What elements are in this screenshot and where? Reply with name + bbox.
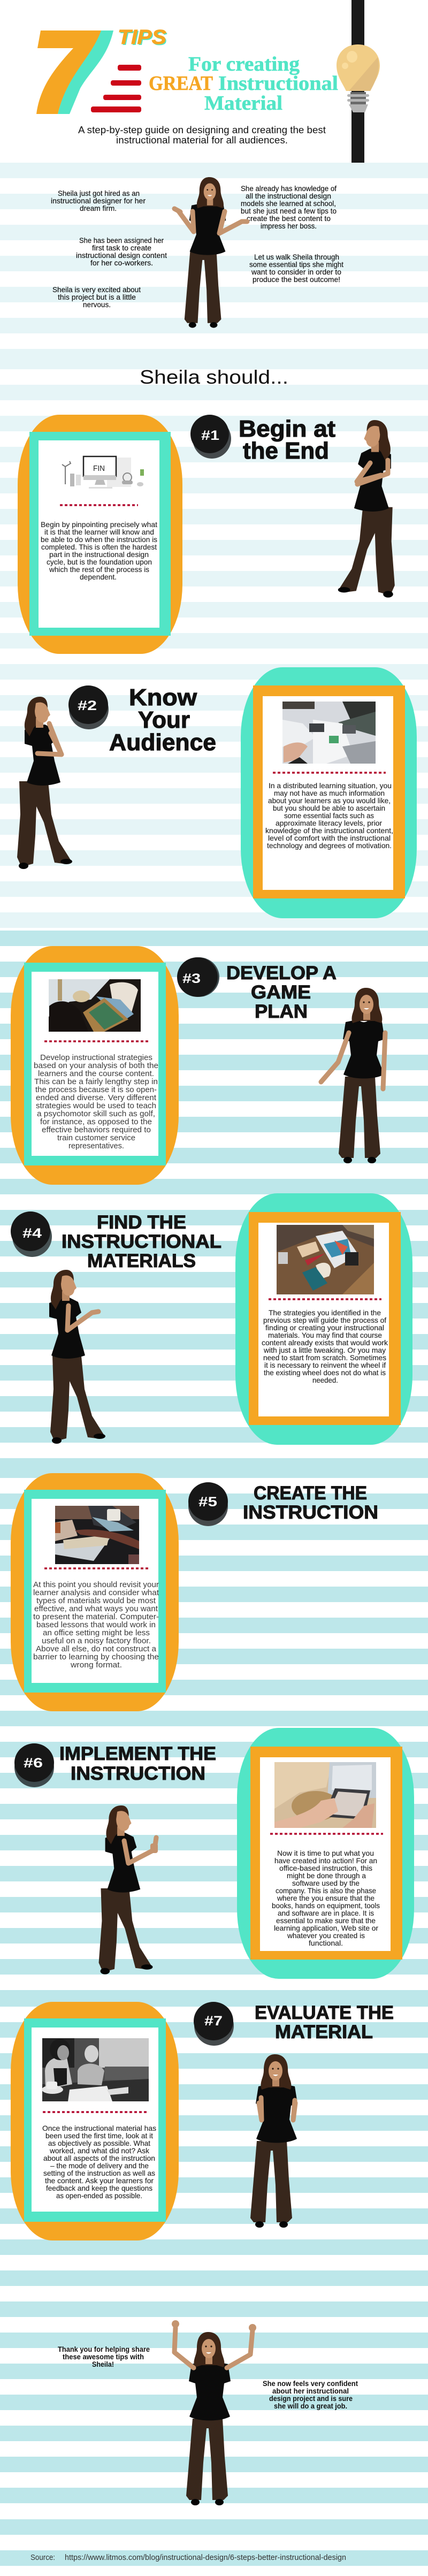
icon: light bulb on cord <box>337 0 380 163</box>
photo: flat lay of products on a table <box>277 1225 374 1294</box>
tip 1 text: Begin by pinpointing precisely what <box>41 520 157 529</box>
panel: tip 4 <box>235 1193 412 1445</box>
tip 2 text: but you should be able to ascertain <box>273 804 385 812</box>
subtitle: instructional material for all audiences. <box>116 135 288 146</box>
tip 2 text: some essential facts such as <box>284 811 374 820</box>
badge: number 4 <box>11 1211 52 1257</box>
subtitle <box>78 125 326 146</box>
tip 5 text: based lessons that would work in <box>36 1620 156 1629</box>
tip 5 text: wrong format. <box>70 1660 122 1670</box>
heading: Find the instructional materials <box>62 1212 221 1271</box>
figure: Sheila with crossed arms <box>338 420 395 598</box>
tip 6 text: essential to make sure that the <box>276 1916 376 1925</box>
title: Material <box>204 92 282 115</box>
intro text: right column 1: She already has knowledge of <box>241 184 337 193</box>
dotted divider <box>269 1298 381 1300</box>
tip 4 text: needed. <box>312 1376 338 1384</box>
source line: https://www.litmos.com/blog/instructional-design/6-steps-better-instructional-design <box>65 2553 346 2562</box>
card frame <box>18 415 182 654</box>
photo: two women laughing at a table <box>42 2038 149 2101</box>
heading: Find the instructional materials: INSTRUCTIONAL <box>62 1231 221 1252</box>
heading: Know Your Audience: Audience <box>109 729 216 756</box>
tip 2 text: technology and degrees of motivation. <box>267 841 392 850</box>
heading: Create the instruction: INSTRUCTION <box>243 1502 378 1523</box>
tip 6 text: learning application, Web site or <box>274 1924 378 1932</box>
photo: computer with FIN on screen <box>62 456 144 489</box>
panel: tip 5 <box>11 1473 179 1711</box>
intro text: left column 2: She has been assigned her <box>79 236 164 245</box>
tip 4 text: need to start from scratch. Sometimes <box>263 1353 386 1362</box>
intro text: left column 2: instructional design content <box>76 251 167 260</box>
panel: tip 1 <box>18 415 182 654</box>
subtitle: A step-by-step guide on designing and creating the best <box>78 125 326 135</box>
tip 3 text <box>34 1053 158 1150</box>
figure: Sheila thinking <box>17 697 72 869</box>
tip 4 text: the existing wheel does not do what is <box>264 1368 386 1377</box>
icon: big number 7 <box>36 31 113 114</box>
tip 6 text: might be done through a <box>287 1871 366 1880</box>
heading: Implement the instruction: INSTRUCTION <box>71 1763 205 1784</box>
intro text: left column 1 <box>51 189 146 212</box>
figure: Sheila gesturing <box>321 988 385 1163</box>
closing text: thank you <box>58 2345 150 2368</box>
intro text: right column 2: some essential tips she might <box>249 260 343 269</box>
tip 3 text: the process because it is so open- <box>35 1085 157 1094</box>
heading: Develop a game plan: GAME <box>251 982 311 1003</box>
card frame <box>237 1728 414 1979</box>
dotted divider <box>270 1833 383 1835</box>
intro text: right column 1: all the instructional design <box>246 192 331 200</box>
closing text: thank you: Thank you for helping share <box>58 2345 150 2353</box>
tip 7 text: as objectively as possible. What <box>48 2139 150 2147</box>
intro text: right column 2: produce the best outcome! <box>253 275 340 284</box>
intro text: right column 2: Let us walk Sheila through <box>254 253 339 261</box>
tip 6 text: have created into action! For an <box>274 1856 377 1865</box>
heading: Develop a game plan: DEVELOP A <box>226 963 337 984</box>
tip 5 text: At this point you should revisit your <box>33 1580 159 1589</box>
heading: Evaluate the material: MATERIAL <box>275 2022 373 2042</box>
panel: tip 3 <box>11 946 179 1185</box>
title: GREAT <box>149 72 213 95</box>
heading: Implement the instruction <box>59 1743 216 1784</box>
intro text: left column 2: first task to create <box>92 243 151 252</box>
tip 1 text: which the rest of the process is <box>49 565 149 574</box>
intro text: left column 1: Sheila just got hired as an <box>58 189 140 197</box>
title: For creating <box>188 53 300 75</box>
tip 3 text: Develop instructional strategies <box>40 1053 152 1062</box>
heading: TIPS: TIPS <box>118 26 166 49</box>
tip 3 text: learners and the course content. <box>38 1069 154 1078</box>
tip 7 text: the content. Ask your learners for <box>45 2176 154 2185</box>
closing text: confident: she will do a great job. <box>274 2402 347 2410</box>
figure: Sheila celebrating <box>172 2320 256 2505</box>
tip 6 text: software used by the <box>292 1879 360 1887</box>
photo: hands over papers <box>282 702 376 764</box>
tip 4 text: content already exists that would work <box>262 1338 388 1347</box>
tip 4 text: The strategies you identified in the <box>269 1308 381 1317</box>
tip 2 text <box>265 781 393 850</box>
heading: Begin at the End: Begin at <box>239 416 335 442</box>
heading: Know Your Audience: Know <box>129 684 197 711</box>
tip 3 text: This can be a fairly lengthy step in <box>34 1077 158 1086</box>
tip 6 text <box>272 1849 380 1947</box>
badge: number 5: #5 <box>198 1495 217 1510</box>
photo: writing at a desk with laptop <box>55 1506 139 1564</box>
tip 1 text <box>41 520 157 581</box>
tip 7 text: feedback and keep the questions <box>46 2184 152 2192</box>
tip 1 text: it is that the learner will know and <box>44 528 154 536</box>
panel: tip 7 <box>11 2002 179 2240</box>
tip 2 text: In a distributed learning situation, you <box>269 781 392 790</box>
tip 4 text: with just a little tweaking. Or you may <box>263 1346 386 1354</box>
tip 4 text: materials. You may find that course <box>268 1331 382 1339</box>
intro text: right column 1: impress her boss. <box>261 222 317 230</box>
tip 5 text: types of materials would be most <box>36 1596 156 1605</box>
tip 7 text: – the mode of delivery and the <box>50 2161 149 2170</box>
card frame <box>11 2002 179 2240</box>
source line: Source: <box>30 2553 55 2562</box>
tip 4 text: it is necessary to reinvent the wheel if <box>264 1361 386 1369</box>
tip 1 text: cycle, but is the foundation upon <box>47 558 152 566</box>
badge: number 2 <box>68 685 109 729</box>
intro text: left column 3: nervous. <box>83 300 111 309</box>
tip 7 text: about all aspects of the instruction <box>43 2154 155 2162</box>
card frame <box>235 1193 412 1445</box>
panel: tip 6 <box>237 1728 414 1979</box>
dotted divider <box>44 1040 149 1042</box>
tip 5 text: an office setting might be less <box>43 1628 150 1637</box>
photo: computer with FIN on screen: FIN <box>93 464 105 473</box>
badge: number 6: #6 <box>24 1756 43 1771</box>
closing text: confident: She now feels very confident <box>263 2379 358 2388</box>
tip 7 text: been used the first time, look at it <box>45 2131 153 2140</box>
dotted divider <box>43 2111 148 2113</box>
badge: number 6 <box>14 1743 54 1787</box>
tip 5 text <box>33 1580 159 1670</box>
heading: Implement the instruction: IMPLEMENT THE <box>59 1743 216 1764</box>
dotted divider <box>273 772 386 774</box>
tip 6 text: where the you ensure that the <box>277 1894 374 1902</box>
tip 1 text: dependent. <box>80 573 117 581</box>
heading: Develop a game plan <box>226 963 337 1022</box>
tip 5 text: barrier to learning by choosing the <box>33 1652 159 1662</box>
tip 3 text: for instance, as opposed to the <box>40 1117 152 1126</box>
photo: hands using a tablet <box>274 1762 376 1828</box>
tip 3 text: based on your analysis of both the <box>34 1061 158 1070</box>
tip 4 text: finding or creating your instructional <box>265 1323 384 1332</box>
tip 1 text: completed. This is often the hardest <box>41 543 157 551</box>
closing text: confident <box>263 2379 358 2410</box>
closing text: thank you: Sheila! <box>92 2360 114 2368</box>
intro text: right column 1: but she just need a few tips to <box>241 207 337 215</box>
tip 7 text: worked, and what did not? Ask <box>49 2146 150 2155</box>
card frame <box>11 1473 179 1711</box>
heading: Know Your Audience <box>109 684 216 756</box>
tip 7 text: setting of the instruction as well as <box>43 2169 155 2177</box>
heading: Evaluate the material <box>255 2002 394 2042</box>
tip 7 text <box>42 2124 156 2200</box>
badge: number 7: #7 <box>204 2014 223 2029</box>
title: Instructional <box>218 72 338 95</box>
photo: people playing table football <box>49 979 141 1032</box>
heading: Create the instruction <box>243 1483 378 1523</box>
badge: number 1: #1 <box>201 428 219 443</box>
heading: Develop a game plan: PLAN <box>255 1001 308 1022</box>
panel: tip 2 <box>241 667 417 918</box>
badge: number 1 <box>190 415 231 459</box>
badge: number 5 <box>188 1482 228 1526</box>
intro text: right column 1 <box>241 184 337 230</box>
badge: number 7 <box>194 2002 234 2046</box>
heading: Create the instruction: CREATE THE <box>254 1483 367 1504</box>
tip 3 text: representatives. <box>68 1141 124 1150</box>
tip 3 text: a psychomotor skill such as golf, <box>37 1109 155 1118</box>
dotted divider <box>44 1567 149 1569</box>
tip 5 text: effective, and what ways you want <box>34 1604 158 1613</box>
tip 5 text: useful on a noisy factory floor. <box>42 1636 151 1645</box>
heading: Find the instructional materials: FIND THE <box>97 1212 186 1233</box>
dotted divider <box>60 504 138 506</box>
tip 6 text: office-based instruction, this <box>279 1864 372 1872</box>
closing text: thank you: these awesome tips with <box>63 2352 144 2361</box>
tip 3 text: ended and diverse. Very different <box>36 1093 157 1102</box>
intro text: left column 2 <box>76 236 167 267</box>
badge: number 3 <box>177 957 219 997</box>
tip 2 text: about your learners as you would like, <box>268 796 391 805</box>
heading: Sheila should: Sheila should... <box>140 366 288 388</box>
tip 7 text: as open-ended as possible. <box>56 2191 142 2200</box>
title <box>149 53 338 115</box>
tip 1 text: part in the instructional design <box>49 550 149 559</box>
badge: number 2: #2 <box>78 698 97 713</box>
heading: Know Your Audience: Your <box>138 707 190 733</box>
tip 6 text: whatever you created is <box>287 1931 365 1940</box>
intro text: left column 3: this project but is a little <box>58 293 136 301</box>
tip 2 text: may not have as much information <box>274 789 385 797</box>
tip 4 text: previous step will guide the process of <box>263 1316 386 1324</box>
intro text: right column 1: models she learned at school, <box>241 199 336 208</box>
heading: Find the instructional materials: MATERIALS <box>87 1251 196 1271</box>
tip 2 text: level of comfort with the instructional <box>268 834 391 842</box>
intro text: right column 2 <box>249 253 343 284</box>
heading: Begin at the End <box>239 416 335 464</box>
tip 5 text: learner analysis and consider what <box>33 1588 159 1597</box>
intro text: right column 2: want to consider in order to <box>251 268 341 276</box>
closing text: confident: design project and is sure <box>269 2394 353 2403</box>
badge: number 4: #4 <box>22 1226 42 1241</box>
tip 7 text: Once the instructional material has <box>42 2124 156 2132</box>
tip 5 text: to present the material. Computer- <box>33 1612 159 1621</box>
heading: Begin at the End: the End <box>243 438 329 464</box>
tip 4 text <box>262 1308 388 1384</box>
tip 6 text: and software are in place. It is <box>278 1909 374 1917</box>
badge: number 3: #3 <box>182 971 201 986</box>
tip 6 text: functional. <box>309 1939 343 1947</box>
tip 6 text: company. This is also the phase <box>276 1886 376 1895</box>
closing text: confident: about her instructional <box>272 2387 349 2395</box>
intro text: right column 1: create the best content to <box>247 214 331 223</box>
tip 5 text: Above all else, do not construct a <box>36 1644 157 1653</box>
intro text: left column 3 <box>52 285 141 309</box>
figure: Sheila thumbs up <box>99 1805 158 1975</box>
tip 3 text: effective behaviors required to <box>42 1125 151 1134</box>
intro text: left column 3: Sheila is very excited about <box>52 285 141 294</box>
intro text: left column 1: dream firm. <box>80 204 117 212</box>
heading: Evaluate the material: EVALUATE THE <box>255 2002 394 2023</box>
tip 6 text: Now it is time to put what you <box>277 1849 374 1857</box>
icon: red stacked bars <box>91 65 141 112</box>
figure: Sheila explaining <box>250 2054 297 2228</box>
heading: TIPS: TIPS <box>119 27 167 50</box>
tip 2 text: knowledge of the instructional content, <box>265 826 393 835</box>
intro text: left column 1: instructional designer for her <box>51 196 146 205</box>
tip 2 text: approximate literacy levels, prior <box>276 819 382 827</box>
intro text: left column 2: for her co-workers. <box>90 258 153 267</box>
card frame <box>11 946 179 1185</box>
figure: Sheila pointing <box>49 1270 105 1444</box>
tip 6 text: books, hands on equipment, tools <box>272 1901 380 1910</box>
card frame <box>241 667 417 918</box>
tip 3 text: strategies would be used to teach <box>36 1101 156 1110</box>
figure: Sheila shrugging <box>174 177 247 328</box>
tip 1 text: be able to do when the instruction is <box>41 535 157 544</box>
tip 3 text: train customer service <box>57 1133 135 1142</box>
